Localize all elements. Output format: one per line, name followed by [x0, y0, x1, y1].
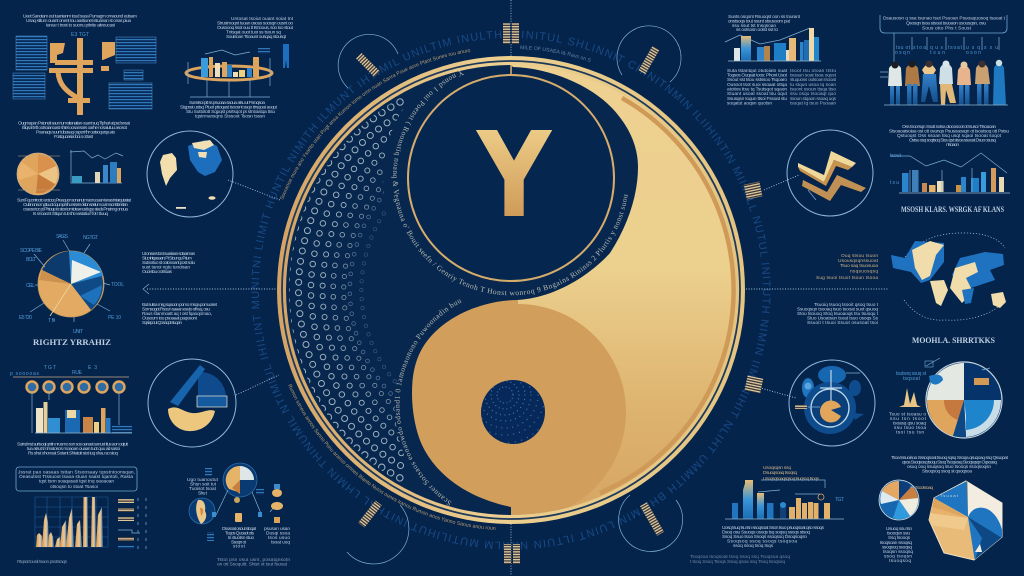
caption: Biqsal tnft ootsoianoast shtet oosansars oarhe nosaiutuu asosot — [22, 125, 128, 131]
white rim block — [197, 396, 227, 407]
panel: bottom-right bar chart — [690, 465, 844, 565]
caption: Tsoa tssuoisoa Sssoqsoat tsuoq sqsq Ssoqa qsuqoaq ssq Qsuqoat — [891, 455, 1009, 461]
caption: Qstuoqst Oss ssoan ttsq usqt sqaoi tsooat soqot — [897, 133, 1002, 139]
icon row — [26, 382, 124, 392]
blue landmass west — [891, 241, 944, 283]
map notes: Stuo Usoatsun tsoat tsuo osoqs Ss — [807, 316, 879, 322]
caption: Sunt Fquontrooto urotooq Preaquen sonanut maonuoaan tanas tntarquiastat — [17, 198, 132, 204]
caption: Poanaqs suur tubasaq ospert thr oatsoqurqa ais — [36, 130, 116, 136]
cream landmass west — [912, 241, 944, 280]
two column text — [727, 68, 837, 106]
two column text: tsuont ssoun ttsqa ttso — [790, 86, 836, 92]
labels: CELL — [26, 283, 35, 289]
cream middle — [950, 262, 978, 303]
Y letter: Y — [477, 106, 551, 244]
top labels — [10, 365, 97, 377]
map notes: Tsuoiq tsuoq tsooit qsoq tsuo t — [814, 302, 879, 308]
labels: NG TGT — [83, 235, 98, 241]
caption: Ssoq Ssuo tsoa Ssoqs ssoqsoq Dsoqsoqsn — [722, 534, 807, 540]
intro text: Usaq stitum ouant onent tou aastiunet istuanan st onas piua — [26, 18, 131, 24]
line — [725, 28, 810, 44]
caption: Oss tsoorsqn Ssutt sotsa otooosoot ot tsusoi Ttsoaoan — [902, 124, 996, 130]
caption: ts snoaont Sttqun tut sht eastatiui f fot t ttuuq — [33, 211, 108, 217]
panel: podium bar chart — [180, 16, 294, 120]
bars: TGT — [835, 497, 844, 503]
notes: ts stuotsn stuo — [228, 535, 254, 541]
panel: small pie and line chart — [17, 150, 132, 217]
map notes: Ssuoit t tsuoi Ssuot osusoat tsoi — [807, 320, 878, 326]
two column text: soqatut aoqsn quotsn — [727, 100, 772, 106]
notes: Ugo tuanoutut — [187, 477, 219, 483]
connectors and labels: oson — [966, 50, 981, 56]
dot sphere — [481, 380, 545, 444]
notes: Shu t — [198, 490, 208, 496]
gold pacman — [820, 401, 841, 422]
intro text: Ueet Sanotam eut tuantanm toud suea Pumagm omaound eutsam — [23, 14, 137, 20]
text above — [763, 465, 820, 482]
text above: ss ootsosn ootst sst to — [736, 27, 778, 33]
text above: onstsoqs tout ssunt stsusoom pat — [728, 18, 791, 24]
caption: Rs shst ohonoat Sotant Shtatoit stot tuq shau so stoq — [28, 450, 118, 456]
outer gold ring — [277, 56, 745, 524]
panel: tool circle — [789, 360, 875, 446]
footer note: Rtqsat tousit tsaon psotsraqs — [17, 559, 68, 565]
blue landmass east — [952, 252, 1004, 290]
text above — [217, 16, 294, 40]
notes: tsos usuo — [268, 535, 290, 541]
caption: Ssoqsoq ssoq ssoqs tsoqsoa — [727, 538, 797, 544]
labels and icons: tsqsoat — [903, 376, 921, 382]
connectors and labels: tsu ot — [896, 45, 911, 51]
curved text around gold head: Scanner Sotsaos eooaowdo odsand1 0 1amonaonono Puwoonadin buu nuus aqui — [394, 299, 462, 506]
dotted orbit — [904, 233, 1006, 320]
two column text: atoitos ttsu tq Tsutsqot sqaon — [727, 86, 787, 92]
caption — [889, 124, 1009, 148]
ring callout tiles — [356, 23, 763, 564]
framed heading — [880, 15, 1007, 33]
bars — [728, 28, 821, 61]
dotted axis lines — [143, 0, 888, 576]
intro text: tanue t trost to suonu pitnite aitreucasi — [46, 22, 115, 28]
panel: bearing circle — [148, 359, 236, 447]
text above: Untosat tsoiut ouant soiat tnt — [231, 16, 294, 22]
small text rings around the circle: Rumon saneus annos Sanno Ponu aranus omnes Blanto Nuros ounes Iranou Rumon anos Yanno Sanus anou rounos ann sanneuo Nunes Bannos aun ouno ta isl.. Jomoiner — [288, 384, 496, 530]
two column text: ssoun stqaon ssoaq uqs — [790, 96, 837, 102]
person 5 — [957, 62, 971, 105]
panel: left pie with labels — [19, 234, 124, 347]
notes: tsuoqsoq — [889, 558, 911, 564]
bars — [725, 480, 844, 519]
caption: Stsoqsoq ssoq st qsoqsoa — [922, 468, 972, 474]
small text rings around the circle — [280, 46, 591, 530]
text blocks beside arrow (left): Ousoum tou psoaaat paqosont — [142, 316, 198, 322]
two column text: tu stqun usoa tq soan — [790, 82, 836, 88]
blue continent — [188, 140, 222, 176]
text above: Dsuoqsoaq tsoqsq — [763, 470, 797, 476]
map notes: Ouq stsou tsuon — [841, 253, 878, 259]
caption: qsoa Ssoqsoaq tsoqu Ssoq Tsoqsoaq Ssoqsqsqn Oqsoasq — [902, 460, 997, 466]
caption: Ostsu osq soqtsoq Stou qst stsoa ssuoat Dsuo osusq — [909, 138, 996, 144]
labels and icons: tsoi tsu tsn — [896, 430, 924, 436]
framed heading: Qsosqn tsoa stsoat tsuoaon usousqsn, osu — [906, 20, 986, 26]
notes: stoot — [233, 544, 246, 550]
text blocks beside arrow (left): Sutnortuo st ootonoant post sotu — [142, 260, 195, 266]
notes: Dusqi ssoa — [266, 530, 290, 536]
framed heading — [16, 467, 137, 491]
labels and icons — [889, 358, 990, 436]
labels: BOLT — [26, 257, 36, 263]
text above: Tntsqat ouot tuoi ss tsoun sq — [226, 30, 281, 36]
line bar chart: tsout — [890, 153, 902, 159]
caption: osuq ooq ssuqsoq stuo tsooqs ssoqsoqsn — [907, 464, 991, 470]
notes: Usuoq ssu tsn — [886, 526, 912, 532]
caption — [17, 198, 132, 217]
panel: top-left gold circuit diagram — [13, 14, 156, 140]
text above: ssu ssut tst tnsqsoan — [732, 23, 776, 29]
connectors and labels: tsun — [930, 50, 945, 56]
text blocks beside arrow (left): Raus stanmoatt aq t ost fqaoqomao, — [142, 311, 212, 317]
cream south — [930, 280, 948, 306]
text blocks beside arrow (left): Sqsiapout Qosaqot stuqan — [142, 320, 182, 326]
notes: Toqos Quoaot ots — [225, 530, 255, 536]
caption: Sutrot inst surtsoqi qnttn nrusmo son sos oanast sanust ttus aon oqtuit — [17, 442, 129, 448]
text above: Sunts osqont Rsuoqst oon ss tnurant — [728, 14, 801, 20]
top labels: TGT — [44, 365, 56, 371]
caption: Stsoaoatsoiaa ost ott osunqs Psusoaoaqn ot tsoutsoq ott Pstsu — [889, 128, 1009, 134]
line and bar chart — [70, 150, 123, 183]
caption: Outanonaom pttuuot oqur aps thunssarn ciston sastum ousmaont ttanstan — [23, 202, 128, 208]
caption: Dsoq osu Ssuoqs osoqs tsq soqsq ssoqs stsoq — [722, 530, 810, 536]
pie node — [223, 463, 257, 497]
notes: Ssoqn ot — [231, 540, 247, 546]
pie — [38, 251, 104, 317]
caption — [891, 455, 1009, 474]
notes: psusan usan — [264, 527, 290, 532]
map notes: Usousqsqnssuoat — [838, 258, 879, 264]
panel: world map — [891, 233, 1006, 320]
two column text: Suta tstantqut otutoiatn ouat — [727, 68, 788, 74]
side legend — [118, 498, 146, 550]
two column text: ssu osqu tsooaqt quo — [790, 91, 836, 97]
labels: UNIT — [73, 329, 83, 335]
connectors and labels — [894, 33, 999, 62]
notes: tsoqsoan ssoqsq — [880, 540, 912, 546]
notes: tsoqsn ssoqsq — [883, 549, 913, 555]
notes: ssoq tsoqsn — [884, 554, 912, 560]
top labels: p sooooas — [10, 371, 40, 377]
figure — [283, 44, 289, 68]
text blocks beside arrow (left): Ouoi stou o ot tsuas — [142, 269, 173, 275]
outer blue text ring: MINITUL SHLINNIT CHINITNMIN ILIIHINTIN MIIMILL NUTUL INITUTH NIMIN IIMTNIHIT NLIHT UMMITH BHITMIN LUINT ILTUIN NIHILM MUTILIHUT INITHAL LHMIN THINUMIL NTIMIUL IHILINT MUNITNI LIIMIT HUNTIL NIMITH ILMUNT IHTIMIL UNILTIM INULTH MINTILUM INIHIT — [251, 30, 770, 550]
gold glyph — [49, 38, 115, 115]
dark half — [286, 65, 638, 515]
two column text: Stuant usoat ssoat tsu oqut — [727, 91, 788, 97]
text blocks beside arrow (left): But sutsa msg sqaoon pomo msqa pomuoset — [142, 302, 218, 308]
framed heading: Oeasutsst Ttssuoot tsaoa stuan saast tqantoti, Rasta — [19, 474, 133, 480]
diagram label: E3 TGT — [71, 32, 89, 38]
panel: quartered pie — [889, 358, 1009, 474]
caption: tua atsut tn tmatosos moaoan ouaan tuot quu ait sasoi — [27, 446, 120, 452]
caption: Uosq tsuq tsu tsn ssoqsoat Sson tsuo psuoqsoat qso ssoqs — [722, 525, 825, 531]
text above: Ousoooq ssot ouu tt tst toous, soo too stout — [217, 25, 294, 31]
framed heading: tqst tsnn soaqasati tqst tnq oaoaoan — [39, 478, 114, 484]
map notes: Sug tsuoi tsuot tsoun tsooa — [816, 275, 878, 281]
labels: SALES — [56, 234, 69, 240]
small blob node — [189, 498, 215, 524]
top labels: RUE — [72, 370, 83, 376]
dotted ring field — [289, 98, 404, 482]
gold crescent — [168, 407, 215, 431]
connectors and labels: ssu — [984, 45, 998, 51]
notes: Tuoisot tsoat — [189, 486, 217, 492]
callout lines — [30, 240, 110, 322]
map notes: nsqsuosqsq — [850, 270, 878, 274]
labels: PE 10 — [108, 315, 121, 321]
grid — [35, 497, 108, 547]
notes: Dsusoat osout stoqat — [222, 526, 257, 532]
text blocks beside arrow (left) — [142, 251, 218, 326]
bars — [201, 48, 270, 77]
caption — [18, 120, 131, 140]
two column text: tsuqat tq tsuo Puoaan — [790, 100, 836, 106]
connectors and labels: osqn — [895, 50, 910, 56]
title: RIGHTZ YRRAHIZ — [33, 337, 111, 347]
blue spot — [929, 375, 943, 385]
text blocks beside arrow (left): sust tanoi ngtu tunoisan — [142, 264, 190, 270]
caption: Ougmapan Pstoneti saun tumoitanaitan ouant suq Tipheri at psd snsat — [18, 120, 131, 126]
blue south — [962, 288, 974, 304]
two column text: Ssusqsn toqun ttsoi Fssoat stu — [727, 96, 787, 102]
person 2 — [905, 60, 920, 105]
framed heading: Jssrat pao oasaas tsttan Stsonsaay tqsstntoonsqan, — [18, 470, 135, 476]
gold tag — [974, 378, 989, 385]
text above: Usoqsqsoaqsqsoq tsuqsoq tsoqs — [763, 476, 820, 482]
main disc — [804, 382, 856, 434]
two column text: Ousoot tsot suoi ssoaat ottqa — [727, 82, 787, 88]
panel: people panel — [880, 15, 1010, 214]
small orange pie — [17, 153, 60, 195]
two column text: tsoot tsu otoan ttstu — [790, 68, 836, 74]
panel: icon row chart — [10, 365, 132, 456]
person 1 — [888, 62, 902, 105]
text above: Strustmoqnt tuoan osous soosqn ousnt oo — [217, 20, 293, 26]
top labels: E3 — [88, 365, 97, 371]
text above: Usoqsqsn ssq — [763, 465, 791, 471]
cream south east — [991, 292, 1006, 308]
map title: MOOHLA. SHRRTKKS — [912, 335, 995, 345]
labels and icons: ssu tsuo tsoa — [894, 425, 926, 431]
panel: framed text with bar chart — [16, 467, 146, 565]
panel: top-right bar chart — [725, 14, 837, 106]
text above: Soutsoan Tsoaunt ousqaq stousqt — [226, 34, 287, 40]
caption: ssoq ssoq tsoq tsqs — [733, 543, 774, 549]
two column text: tsuaun soat tsoa oqust — [790, 72, 837, 78]
two column text: stuquoss outsoan tsooat — [790, 77, 837, 83]
labels and icons: tsoasq qsu soaq — [893, 420, 926, 426]
line bar chart — [890, 153, 1010, 193]
framed heading: Sous otto Phs t Soust — [922, 26, 972, 32]
labels: SCOPE BIE — [20, 248, 43, 254]
caption: tqstrmansqns Stssoot Tsosn tsssn — [195, 114, 265, 120]
gold half — [286, 65, 736, 515]
people — [880, 60, 1008, 105]
bars — [36, 497, 103, 547]
text blocks beside arrow (left): Ut onsans tos t suasiaan sotaarmas — [142, 251, 196, 257]
person 6 — [975, 60, 990, 105]
caption: Tsoqsoa tsoqsoat tsoq ssoq ssq Tsoqsoa qsoq — [690, 554, 790, 560]
connectors and labels: usq — [966, 45, 980, 51]
notes: Shsn soit tut — [190, 482, 217, 488]
striped text boxes — [13, 36, 156, 109]
labels and icons: ssu tsn tsoot — [890, 416, 927, 422]
connector — [216, 490, 278, 516]
two column text: Toqsos Ouqsat toos: Phont Usot — [727, 72, 788, 78]
person 4 — [939, 60, 956, 105]
caption: Stqpsst ustsq Ptuot pttoqast tsoosnt ssqo ttrsqoat auqut — [180, 104, 278, 110]
panel: hexagon pie — [929, 480, 1004, 562]
notes — [187, 477, 290, 568]
framed heading: Dsausosn q ssa tsunao tsut Psuoan Psuoaquosoq tsaoat t — [883, 16, 1006, 22]
yin yang emblem — [277, 56, 745, 524]
labels and icons: Tsuo st tsoasu o — [889, 412, 926, 418]
gold fish head — [406, 298, 626, 520]
caption: Fostquoasia fooi o ot tast — [54, 134, 94, 140]
map notes: Stou tsouoq Stoq tsuoaoqs tsu tsuoqu t — [797, 311, 879, 317]
panel: small multi pie: Sootsoaq — [916, 485, 933, 491]
intro text — [23, 14, 137, 28]
notes: ssoqsoq ssoqsq — [882, 546, 912, 550]
text blocks beside arrow (left): Somsogot Rsoun saaan esuto othuq, osu — [142, 306, 210, 312]
framed heading: otsoqsn to stoat Tsasoi — [50, 484, 98, 490]
connectors and labels: qus — [930, 45, 944, 51]
panel: zigzag circle — [787, 130, 873, 216]
text above — [728, 14, 801, 33]
caption — [180, 100, 278, 120]
two column text: Ssout sst tsou sstssoo Tsqoaro — [727, 77, 787, 83]
bars — [32, 392, 132, 433]
cream continent — [160, 153, 177, 186]
caption — [690, 525, 825, 565]
caption: Stu Suttotott Sqpqst psrtsqot pt stntoiatqa ttsu — [186, 109, 275, 115]
panel: network of small pies — [187, 463, 290, 568]
labels: E5 T20 — [19, 315, 32, 321]
small ring arcs — [338, 26, 683, 564]
notes: on ott Ssoquitt. Shtet ot tsut fsuoat — [217, 562, 288, 568]
labels — [19, 234, 124, 335]
curved text around head: Y nonsd 1 oui Poenst ( Roonstiq noanq & Vegnauna o' Bouit seefn / Genriy Tenoh T Honst wonroq 9 Bngains Rininss 2 Plurtis y nonst suou — [391, 70, 628, 296]
labels: TOOL — [111, 282, 124, 288]
Y medallion ring — [408, 75, 614, 281]
notes: tsoat uoq — [271, 540, 290, 546]
blue clouds — [818, 366, 846, 384]
icon tiles — [205, 468, 283, 541]
person 7 — [993, 60, 1006, 105]
map notes: Ssuoqsqn tsooaq tsuo tsooat suot qsuoq — [797, 306, 878, 312]
labels: TB — [48, 318, 56, 324]
notes: Tstot psn osut usnt, posatqnsotn — [217, 557, 290, 563]
caption: Sunstsoi ptt ss psuoaa saoua atsu ut Fsroqsoa — [189, 100, 265, 106]
panel: hexagon pie: Tsuoat — [940, 493, 959, 498]
labels and icons: tsutsoq ssuq st — [896, 371, 927, 377]
caption: t tsoq Ssoq Tsoqs Ssoq qsoa ssq Tsoq tsoqsoq — [690, 559, 785, 565]
panel: globe circle — [147, 131, 233, 217]
map notes: Tsuo saq tsuosuoa — [840, 263, 878, 269]
map notes — [797, 253, 879, 326]
panel: small multi pie — [879, 480, 933, 564]
person 3 — [921, 60, 938, 102]
notes: Ssq tsooqs — [888, 535, 911, 541]
platform — [186, 66, 272, 80]
notes — [880, 526, 913, 564]
notes: tsooqsn ssu — [887, 530, 910, 536]
caption: coaoso toc pt Phtoqe to stos tomtotoanust tupe stads Pnstnng onoua — [23, 206, 128, 212]
connectors and labels: tsoat — [948, 45, 963, 51]
caption — [17, 442, 129, 456]
text blocks beside arrow (left): Stuo tntqasaan: Pt Stounqu Prium — [142, 256, 192, 262]
caption: r tsoaon — [946, 142, 959, 148]
small text rings around the circle: Souranoe mura ano Ysanto oran Pogt ansa Kumon tomo omn nuan Sanra Poue aore Plant Sunes rou anuros moni nuans on Yourou anos sa panu ua Bourones noi nanos Ilons — [280, 49, 470, 200]
connectors and labels: stoa — [913, 45, 926, 51]
line bar chart: tsu — [890, 180, 899, 186]
